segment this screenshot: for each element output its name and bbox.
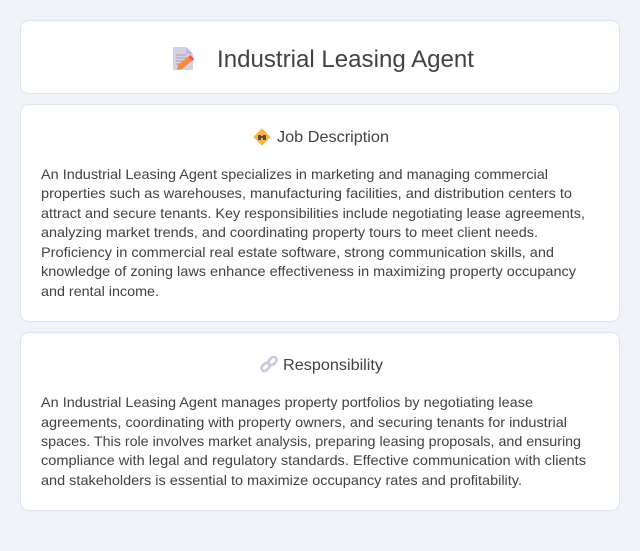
heading: job description: Job Description — [277, 129, 389, 146]
panel: job description — [20, 104, 620, 322]
panel: title card — [20, 20, 620, 94]
title: Industrial Leasing Agent — [217, 46, 474, 73]
text block: responsibility: and stakeholders is essential to maximize occupancy rates and profitability. — [41, 472, 522, 488]
text block: job description: An Industrial Leasing Agent specializes in marketing and managing commercial — [41, 166, 548, 182]
icon: orange diamond — [254, 129, 270, 145]
text block: job description: properties such as warehouses, manufacturing facilities, and distribution centers to — [41, 185, 572, 201]
text block: responsibility: agreements, coordinating with property owners, and securing tenants for industrial — [41, 414, 567, 430]
text block: job description: knowledge of zoning laws enhance effectiveness in maximizing property occupancy — [41, 263, 576, 279]
text block: responsibility: compliance with legal and regulatory standards. Effective communication with clients — [41, 452, 586, 468]
icon: document with pencil — [173, 47, 194, 70]
text block: responsibility: An Industrial Leasing Agent manages property portfolios by negotiating lease — [41, 394, 533, 410]
text block: job description: attract and secure tenants. Key responsibilities include negotiating lease agreements, — [41, 205, 585, 221]
panel: responsibility — [20, 332, 620, 510]
text block: responsibility — [41, 394, 586, 488]
heading: responsibility: Responsibility — [283, 357, 383, 374]
icon: chain link — [260, 356, 278, 372]
text block: job description: Proficiency in commercial real estate software, strong communication skills, and — [41, 244, 554, 260]
text block: job description: analyzing market trends, and coordinating property tours to meet client needs. — [41, 224, 538, 240]
text block: job description: and rental income. — [41, 283, 159, 299]
text block: job description — [41, 166, 585, 299]
text block: responsibility: spaces. This role involves market analysis, preparing leasing proposals, and ensuring — [41, 433, 581, 449]
